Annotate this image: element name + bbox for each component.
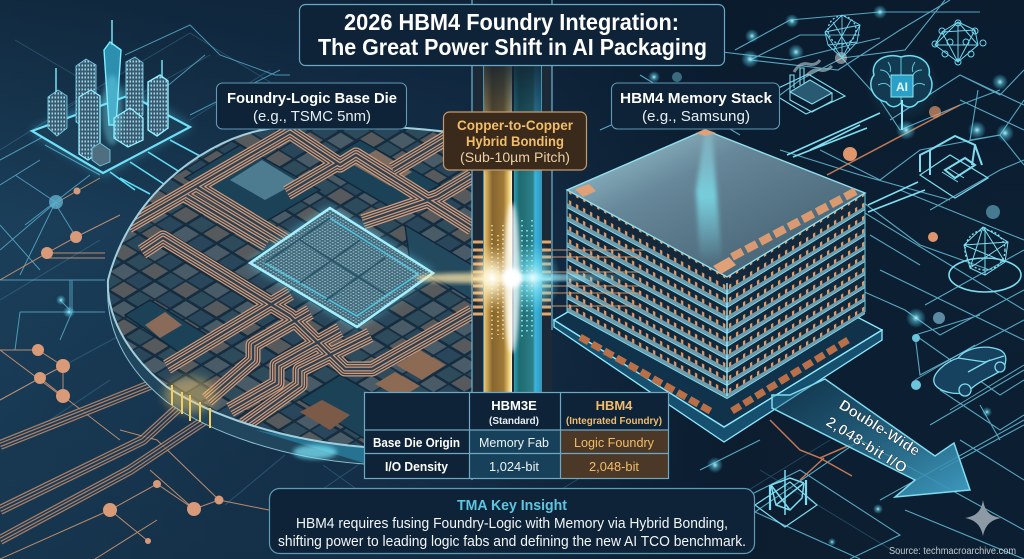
label: foundry-logic base die [216, 83, 406, 129]
icon: robot arm [920, 136, 988, 198]
table row: I/O density: I/O Density [385, 459, 449, 474]
callout: TMA key insight: TMA Key Insight [457, 497, 567, 514]
table row: base die origin [373, 435, 654, 450]
speckle [492, 225, 503, 340]
label: HBM4 memory stack: (e.g., Samsung) [642, 108, 750, 125]
callout: TMA key insight: HBM4 requires fusing Foundry-Logic with Memory via Hybrid Bonding, [296, 516, 728, 532]
source: Source: techmacroarchive.com [889, 546, 1016, 557]
stack side walls [567, 190, 865, 394]
table header: HBM3E: HBM3E [491, 398, 537, 413]
nodes left [32, 188, 224, 544]
icon: neural net right [932, 20, 986, 65]
arrow label line 2: 2,048-bit I/O [823, 414, 910, 477]
copper link lines right [770, 105, 960, 480]
network background: right [600, 0, 1024, 559]
label: HBM4 memory stack [612, 83, 780, 129]
copper network upper left [0, 178, 269, 559]
base plate [554, 320, 882, 442]
table row: base die origin: Memory Fab [479, 435, 549, 450]
HBM4 memory stack [554, 129, 882, 442]
wafer [100, 115, 480, 470]
table header: HBM3E: (Standard) [489, 416, 539, 427]
label: HBM4 memory stack: HBM4 Memory Stack [620, 90, 773, 107]
table row: I/O density: 1,024-bit [489, 459, 539, 474]
label: foundry-logic base die: (e.g., TSMC 5nm) [253, 108, 371, 125]
arrow label line 1: Double-Wide [836, 397, 923, 460]
wafer edge highlight [108, 125, 472, 447]
network left [0, 25, 290, 350]
nodes right [648, 5, 1014, 546]
label: copper-to-copper hybrid bonding [444, 112, 586, 170]
copper combs [473, 242, 551, 314]
icon: neural sphere [825, 15, 860, 58]
callout: TMA key insight: shifting power to leading logic fabs and defining the new AI TCO benchmark. [278, 534, 746, 550]
copper bundle lower left [0, 385, 205, 540]
icon: car [915, 345, 1024, 410]
table row: I/O density: 2,048-bit [589, 459, 639, 474]
table row: base die origin: Base Die Origin [373, 435, 460, 450]
comparison table [364, 392, 668, 478]
table header: HBM4: HBM4 [596, 398, 633, 413]
label: foundry-logic base die: Foundry-Logic Base Die [227, 90, 397, 107]
hybrid bonding band [472, 0, 552, 480]
icon: city on platform [30, 20, 200, 194]
copper traces on wafer [128, 122, 472, 425]
icon: factory [770, 60, 845, 114]
label: copper-to-copper hybrid bonding: (Sub-10µm Pitch) [460, 150, 570, 165]
callout: TMA key insight [270, 488, 754, 554]
icon: lower tower [755, 470, 817, 527]
icon: sparkle [965, 500, 1001, 536]
table header: HBM4 [566, 398, 662, 427]
wafer rim [108, 282, 472, 470]
wafer surface [109, 129, 472, 446]
central logic chip [250, 208, 433, 327]
label: copper-to-copper hybrid bonding: Copper-to-Copper [457, 118, 574, 133]
copper pads on top face [575, 129, 736, 274]
table row: I/O density [385, 459, 639, 474]
top face [567, 130, 865, 277]
AI chip label: AI [896, 80, 908, 94]
title [300, 4, 724, 66]
table header: HBM4: (Integrated Foundry) [566, 416, 662, 427]
icon: neural sphere lower [949, 227, 1021, 292]
table row: base die origin: Logic Foundry [574, 435, 654, 450]
table header: HBM3E [489, 398, 539, 427]
cyan arrows right [787, 113, 925, 212]
title: The Great Power Shift in AI Packaging [318, 34, 707, 60]
title: 2026 HBM4 Foundry Integration: [344, 9, 679, 35]
memory layers [567, 307, 865, 398]
bonding flash and rays [415, 203, 645, 353]
arrow: double-wide I/O [772, 379, 970, 497]
icon: AI brain [864, 47, 940, 130]
label: copper-to-copper hybrid bonding: Hybrid Bonding [466, 134, 564, 149]
